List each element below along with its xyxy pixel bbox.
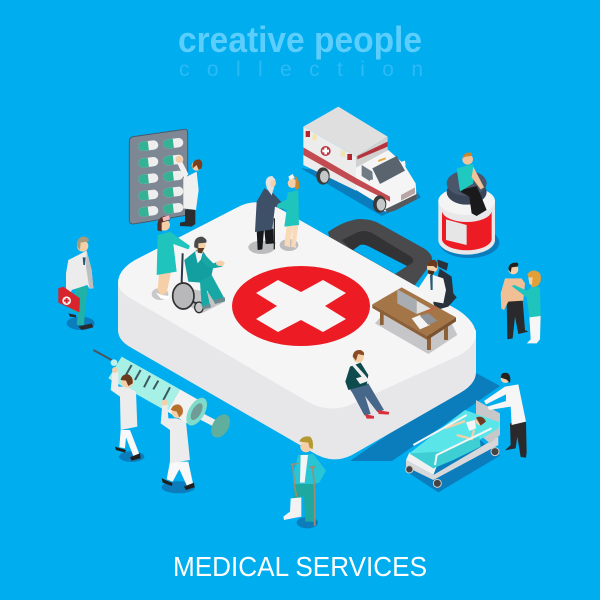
doctor at desk <box>418 259 457 310</box>
nurse greeting <box>277 174 299 251</box>
ambulance <box>301 107 421 216</box>
front doctor lifting syringe <box>111 367 144 462</box>
boy with arm in sling <box>345 350 389 419</box>
patient and doctor with stethoscope <box>501 263 541 343</box>
rear doctor lifting syringe <box>161 400 195 493</box>
pharmacist <box>176 156 202 227</box>
doctor at bedside <box>484 373 527 458</box>
jar with seated man <box>438 153 499 258</box>
nurse pushing wheelchair <box>152 215 190 300</box>
footer heading: MEDICAL SERVICES <box>173 551 427 582</box>
first aid kit body <box>118 202 476 459</box>
man on crutches <box>283 436 326 528</box>
elderly man with cane <box>248 176 285 254</box>
subtitle: collection <box>179 58 423 81</box>
kit ground shadow <box>350 373 500 461</box>
hospital bed with patient <box>406 400 500 492</box>
office desk with laptop <box>372 287 457 354</box>
doctor with red medical bag <box>58 237 95 330</box>
red cross emblem <box>232 266 370 346</box>
blister pack of pills <box>129 129 188 224</box>
syringe carried by doctors <box>93 350 234 441</box>
first aid kit handle <box>328 219 432 285</box>
man in wheelchair <box>173 237 225 313</box>
title: creative people <box>178 19 422 60</box>
